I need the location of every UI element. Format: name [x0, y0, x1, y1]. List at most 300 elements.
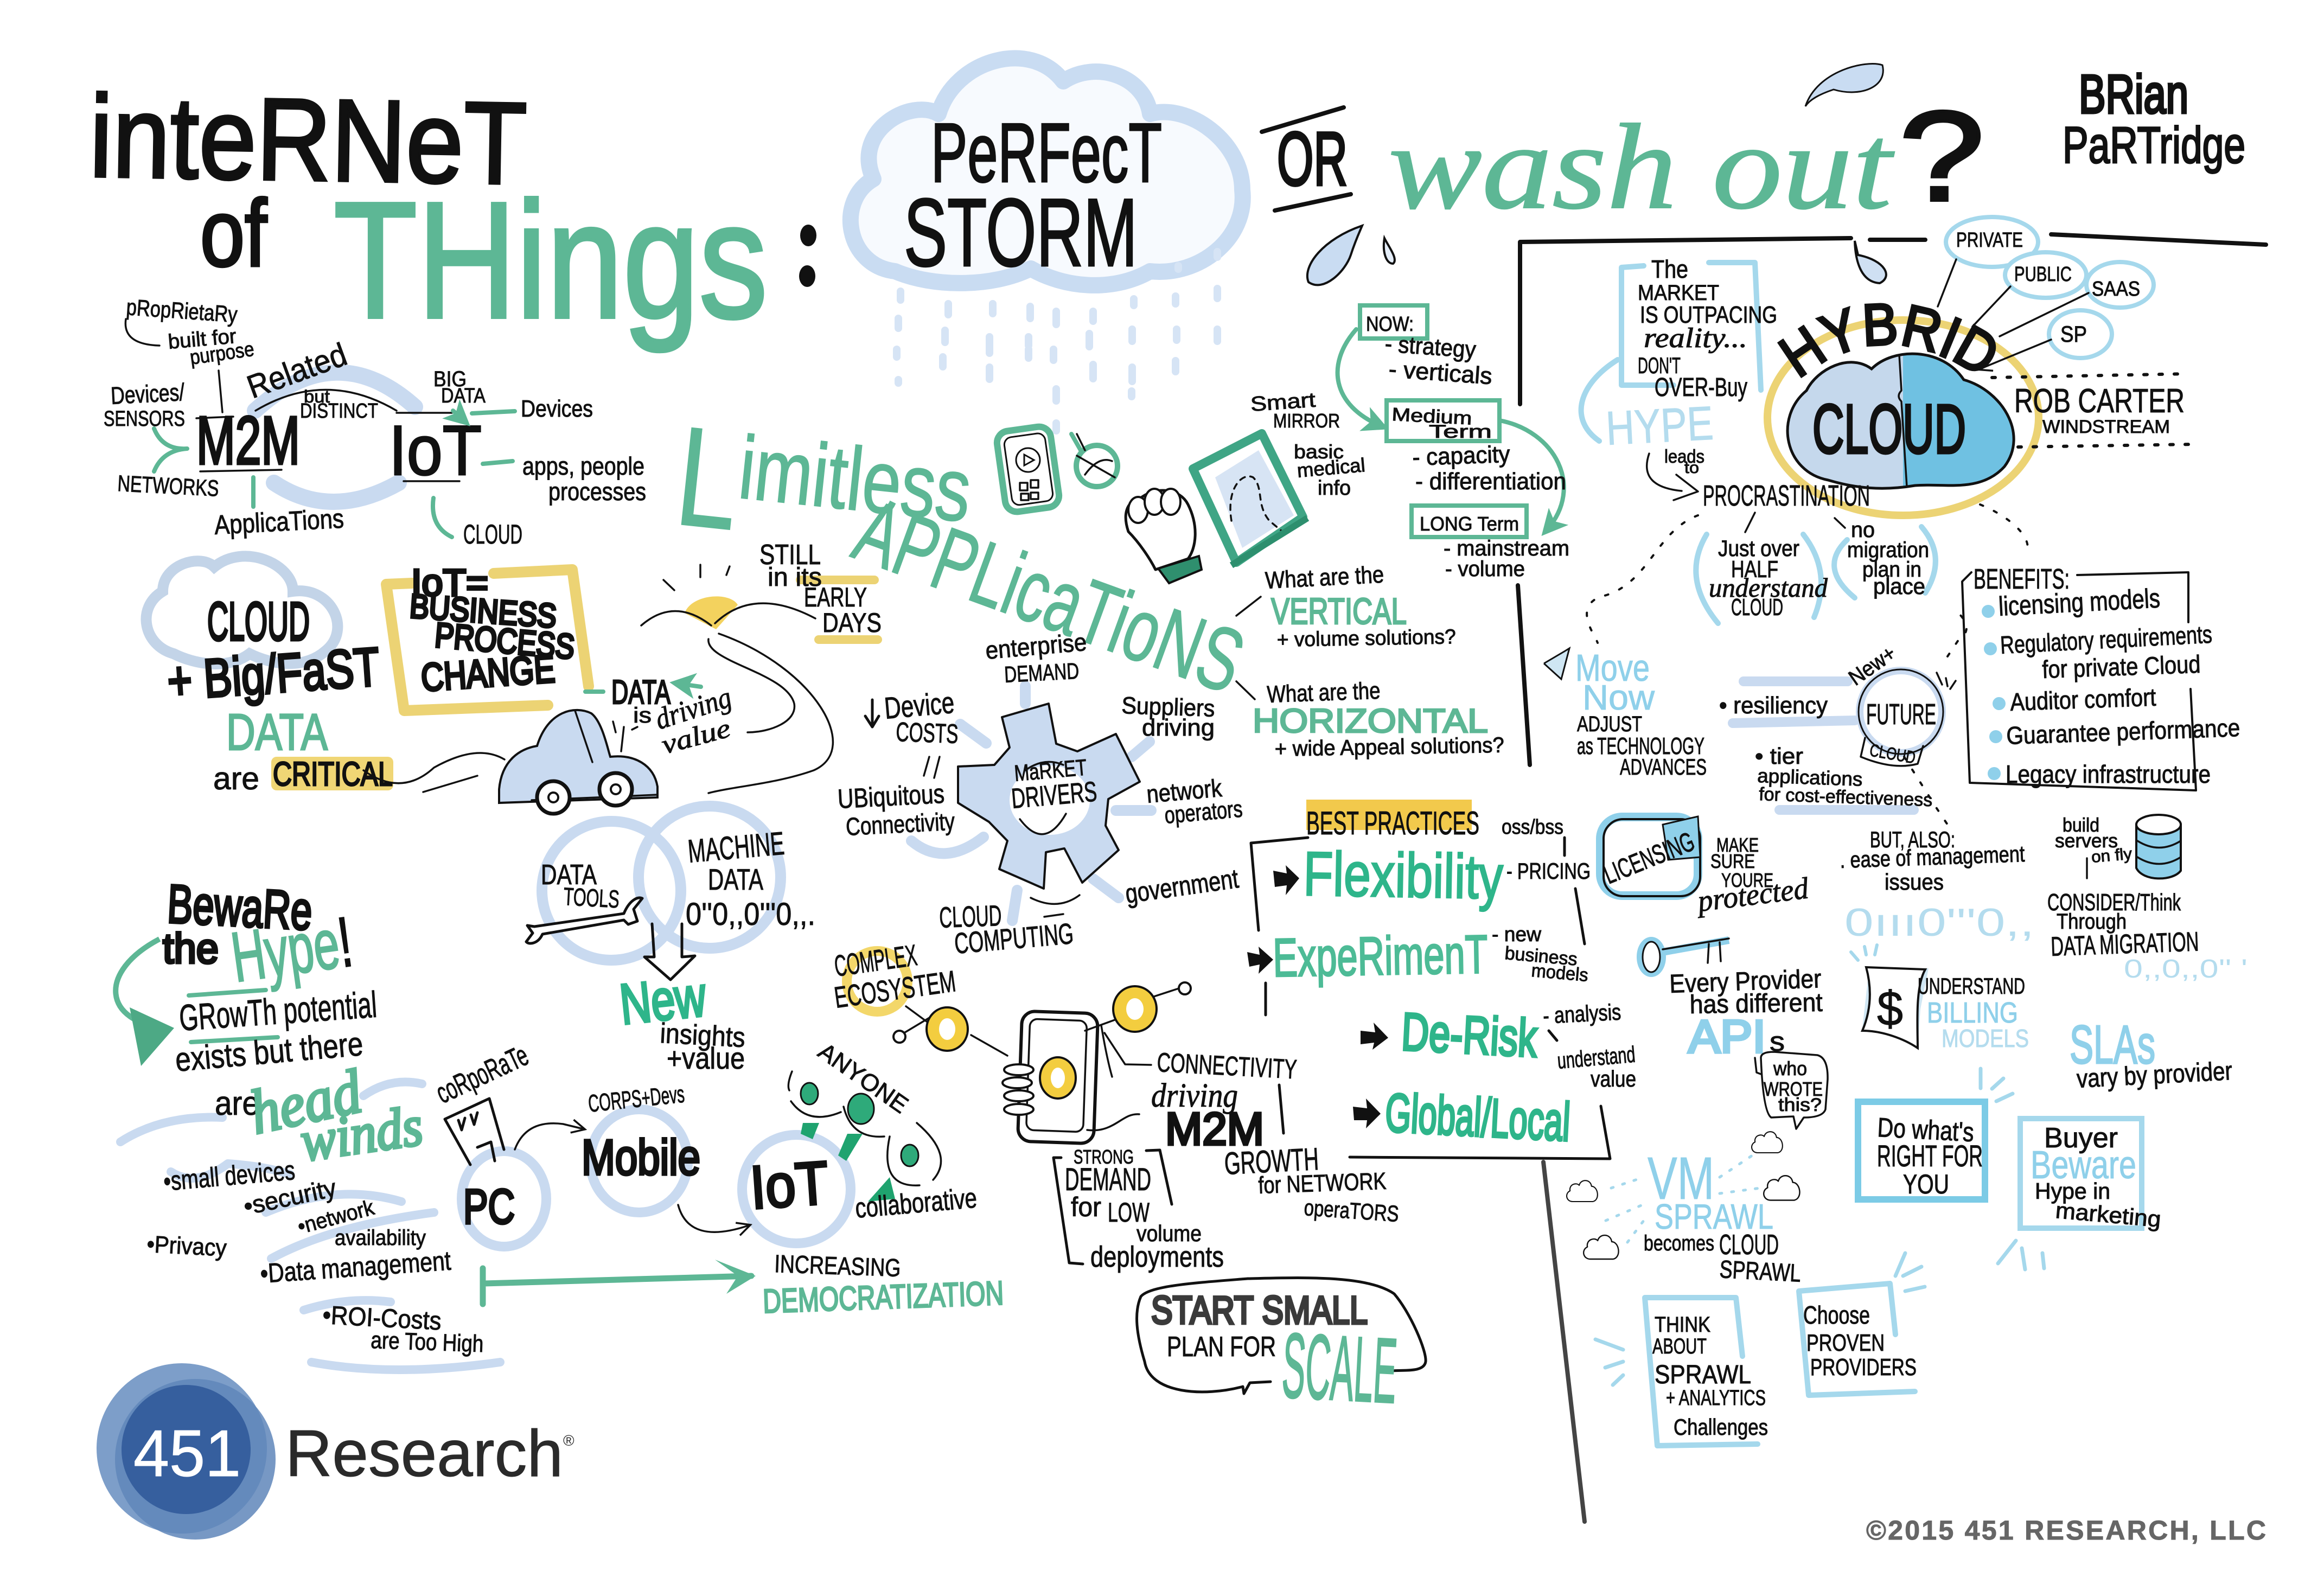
panel: complex ecosystem phone — [832, 938, 1400, 1273]
icon: check mark — [1544, 648, 1569, 679]
presenter: Brian Partridge: PaRTridge — [2063, 117, 2245, 174]
panel: beware the hype: GRowTh potential — [178, 984, 378, 1039]
panel: do what's right for you — [1858, 1069, 2013, 1199]
panel: M2M vs IoT: but — [304, 387, 330, 406]
panel: complex ecosystem phone: LOW — [1108, 1197, 1150, 1228]
panel: beware the hype: head — [244, 1057, 367, 1147]
icon: crystal ball future — [1859, 669, 1943, 768]
panel: billing models: BILLING — [1927, 997, 2018, 1029]
panel: APIs key: this? — [1778, 1095, 1822, 1115]
panel: roadmap now medium long term: - verticals — [1388, 356, 1493, 389]
panel: market outpacing reality: DON'T — [1638, 353, 1681, 378]
panel: APIs key: s — [1770, 1026, 1785, 1057]
panel: VM sprawl: becomes — [1644, 1231, 1714, 1255]
panel: best practices: - analysis — [1542, 999, 1621, 1029]
icons: wearables: medical — [1296, 454, 1366, 482]
icon: gear — [958, 704, 1140, 889]
panel: move now and future cloud: Now — [1582, 678, 1655, 717]
icons: wearables: MIRROR — [1273, 410, 1340, 432]
arrow: curved green — [116, 939, 167, 1028]
panel: data tools and machine data venn: MACHINE — [686, 825, 786, 870]
logo: 451 Research: ® — [563, 1432, 574, 1449]
icon: wrench — [526, 898, 642, 943]
panel: licensing: LICENSING — [1599, 826, 1699, 890]
panel: move now and future cloud: as TECHNOLOGY — [1577, 733, 1704, 759]
heading: Limitless Applications: imitless — [735, 417, 976, 541]
panel: M2M vs IoT: apps, people — [522, 452, 644, 480]
panel: hybrid cloud — [1764, 215, 2190, 519]
panel: benefits: Legacy infrastructure — [2006, 760, 2211, 788]
icons: wearables: Smart — [1250, 389, 1317, 416]
panel: beware the hype: are — [215, 1085, 259, 1122]
icon: lamp — [1071, 434, 1118, 487]
panel: but also data migration — [1840, 814, 2248, 984]
panel: data driving value with car and road: DAYS — [822, 608, 882, 638]
panel: roadmap now medium long term: NOW: — [1366, 313, 1414, 336]
speech bubble — [1755, 1052, 1828, 1129]
panel: hybrid cloud: PUBLIC — [2014, 263, 2072, 286]
panel: market outpacing reality: migration — [1847, 538, 1929, 562]
panel: billing models: MODELS — [1942, 1024, 2029, 1052]
panel: vertical or horizontal: HORIZONTAL — [1253, 703, 1488, 740]
panel: benefits: Regulatory requirements — [2000, 620, 2213, 659]
panel: roadmap now medium long term: - strategy — [1384, 330, 1477, 363]
panel: complex ecosystem phone: GROWTH — [1223, 1141, 1319, 1182]
panel: beware the hype: availability — [335, 1226, 426, 1250]
panel: market outpacing reality: OVER-Buy — [1655, 373, 1747, 402]
arrows — [154, 411, 515, 537]
panel: but also data migration: 0,,0,,0'' ' — [2124, 955, 2248, 984]
panel: M2M vs IoT: Related — [242, 336, 352, 405]
heading: Limitless Applications — [669, 397, 1256, 712]
panel: beware the hype: •ROI-Costs — [322, 1301, 442, 1336]
panel: market outpacing reality: reality... — [1644, 323, 1747, 354]
panel: IoT business process change: BUSINESS — [408, 588, 558, 635]
heading: Limitless Applications: APPLicaTioNS — [842, 480, 1256, 712]
callout: start small plan for scale: PLAN FOR — [1167, 1331, 1276, 1363]
panel: roadmap now medium long term: Medium — [1391, 404, 1472, 429]
panel: best practices: models — [1530, 960, 1589, 986]
panel: vertical or horizontal: What are the — [1267, 678, 1381, 708]
panel: benefits — [1962, 564, 2240, 790]
arrow — [644, 924, 695, 980]
panel: M2M vs IoT: Devices — [521, 395, 593, 422]
panel: IoT business process change: PROCESS — [433, 615, 576, 666]
panel: Cloud big fast data: DATA — [226, 704, 328, 761]
hybrid cloud icon — [1787, 354, 2014, 488]
icon: fist with band — [1126, 489, 1202, 583]
panel: complex ecosystem phone: M2M — [1165, 1103, 1264, 1154]
panel: hybrid cloud: CLOUD — [1812, 391, 1966, 468]
panel: data tools and machine data venn: DATA — [541, 859, 597, 891]
panel: PC to mobile to IoT: CORPS+Devs — [587, 1080, 686, 1118]
icon: smart mirror — [1193, 433, 1307, 565]
panel: market outpacing reality: IS OUTPACING — [1640, 302, 1777, 328]
panel: move now and future cloud: • tier — [1755, 743, 1803, 769]
panel: but also data migration: servers — [2055, 829, 2118, 852]
heading: internet: inteRNeT — [88, 71, 528, 209]
icon: sun and hills — [685, 596, 738, 629]
panel: best practices: oss/bss — [1502, 816, 1563, 839]
arrow: democratization timeline — [483, 1260, 756, 1304]
panel: best practices: value — [1591, 1066, 1636, 1091]
panel: best practices — [1247, 800, 1636, 1159]
panel: benefits: BENEFITS: — [1974, 564, 2070, 595]
panel: complex ecosystem phone: volume — [1137, 1221, 1202, 1246]
panel: roadmap now medium long term: LONG Term — [1420, 513, 1519, 535]
panel: data driving value with car and road — [363, 539, 882, 814]
icon: crystal ball future: FUTURE — [1866, 698, 1936, 731]
panel: do what's right for you: YOU — [1903, 1169, 1949, 1199]
icon: arrows — [1247, 865, 1388, 1128]
panel: think about sprawl: THINK — [1655, 1313, 1710, 1337]
panel: PC to mobile to IoT — [431, 1038, 1004, 1320]
panel: M2M vs IoT: built for — [167, 325, 238, 354]
panel: hybrid cloud: ROB CARTER — [2014, 382, 2185, 420]
panel: data driving value with car and road: value — [658, 712, 733, 760]
panel: buyer beware: Buyer — [2044, 1122, 2118, 1154]
heading: or: OR — [1277, 116, 1348, 201]
panel: move now and future cloud: • resiliency — [1719, 692, 1828, 719]
copyright: ©2015 451 RESEARCH, LLC — [1866, 1515, 2266, 1546]
panel: PC to mobile to IoT: coRpoRaTe — [431, 1038, 533, 1110]
panel: hybrid cloud: SAAS — [2092, 278, 2140, 301]
panel: data driving value with car and road: is — [633, 704, 652, 727]
panel: hybrid cloud: PRIVATE — [1956, 229, 2023, 252]
panel: best practices: Global/Local — [1384, 1082, 1572, 1153]
panel: VM sprawl: SPRAWL — [1655, 1197, 1773, 1236]
icon: car — [499, 710, 657, 814]
panel: VM sprawl: VM — [1648, 1145, 1714, 1212]
icon: key — [1639, 938, 1729, 974]
panel: market drivers gear: operators — [1164, 796, 1243, 829]
panel: complex ecosystem phone: STRONG — [1074, 1146, 1134, 1168]
rain — [897, 252, 1217, 431]
question mark: ? — [1899, 85, 1984, 227]
panel: move now and future cloud — [1544, 613, 1967, 825]
panel: PC to mobile to IoT: IoT — [748, 1148, 831, 1222]
icon: phone in hand — [1003, 1011, 1098, 1144]
panel: complex ecosystem phone: CONNECTIVITY — [1156, 1047, 1298, 1084]
panel: buyer beware: Beware — [2031, 1144, 2136, 1187]
panel: market drivers gear: CLOUD — [938, 899, 1002, 934]
panel: vertical or horizontal: VERTICAL — [1271, 591, 1407, 632]
panel: but also data migration: on fly — [2091, 845, 2133, 866]
panel: data driving value with car and road: STILL — [759, 539, 821, 571]
panel: Cloud big fast data: are — [213, 761, 259, 796]
icon: dollar bill — [1862, 967, 1929, 1048]
panel: but also data migration: build — [2063, 814, 2099, 836]
small clouds: private public saas sp — [1946, 217, 2154, 358]
panel: market outpacing reality: The — [1651, 255, 1688, 283]
panel: best practices: Flexibility — [1303, 839, 1504, 912]
storm cloud — [851, 58, 1243, 285]
icon: phone remote — [995, 425, 1061, 513]
panel: M2M vs IoT: processes — [548, 477, 646, 506]
panel: best practices: BEST PRACTICES — [1306, 805, 1479, 841]
panel: buyer beware: marketing — [2054, 1197, 2162, 1232]
panel: beware the hype: exists but there — [174, 1025, 365, 1079]
panel: do what's right for you: RIGHT FOR — [1877, 1139, 1983, 1173]
panel: but also data migration: Through — [2057, 910, 2127, 934]
panel: choose proven providers — [1799, 1253, 1925, 1395]
panel: buyer beware: Hype in — [2035, 1178, 2110, 1204]
panel: billing models: UNDERSTAND — [1918, 973, 2025, 999]
panel: hybrid cloud: HYBRID — [1777, 303, 1996, 379]
panel: best practices: understand — [1556, 1042, 1636, 1074]
panel: think about sprawl: ABOUT — [1652, 1334, 1707, 1358]
panel: market drivers gear: Suppliers — [1121, 692, 1215, 722]
panel: market outpacing reality — [1581, 255, 2028, 643]
logo: 451 Research — [97, 1363, 574, 1540]
panel: roadmap now medium long term — [1338, 305, 1569, 581]
icon: person in corner — [1663, 816, 1700, 860]
panel: best practices: ExpeRimenT — [1272, 924, 1488, 988]
logo: 451 Research: 451 — [133, 1416, 241, 1490]
panel: think about sprawl: SPRAWL — [1655, 1361, 1751, 1389]
panel: move now and future cloud: applications — [1757, 764, 1863, 790]
panel: market outpacing reality: CLOUD — [1731, 594, 1783, 621]
panel: think about sprawl — [1595, 1298, 1768, 1446]
panel: think about sprawl: + ANALYTICS — [1666, 1386, 1766, 1410]
logo: 451 Research: Research — [285, 1416, 563, 1490]
panel: think about sprawl: Challenges — [1674, 1414, 1768, 1440]
panel: IoT business process change: IoT= — [411, 561, 488, 604]
panel: data tools and machine data venn: TOOLS — [563, 882, 620, 913]
icon: dollar bill: $ — [1877, 982, 1903, 1036]
panel: choose proven providers: PROVEN — [1806, 1330, 1885, 1356]
pale spokes — [911, 686, 1151, 921]
panel: billing models: SLAs — [2070, 1014, 2155, 1075]
panel: choose proven providers: PROVIDERS — [1810, 1354, 1917, 1381]
panel: complex ecosystem phone: ECOSYSTEM — [832, 964, 957, 1014]
colon — [799, 225, 816, 287]
panel: benefits: Auditor comfort — [2010, 683, 2156, 716]
panel: market drivers gear: MaRKET — [1013, 754, 1088, 786]
panel: APIs key: who — [1773, 1057, 1807, 1080]
icon: collaborating people — [788, 1071, 941, 1202]
panel: roadmap now medium long term: Term — [1429, 422, 1492, 442]
panel: market outpacing reality: no — [1851, 518, 1875, 542]
panel: move now and future cloud: Move — [1575, 647, 1650, 689]
panel: M2M vs IoT: ApplicaTions — [214, 503, 344, 540]
panel: M2M vs IoT: DATA — [441, 385, 486, 407]
heading: Storm: STORM — [904, 178, 1138, 286]
panel: hybrid cloud: SP — [2060, 321, 2087, 347]
panel: data driving value with car and road: driving — [651, 680, 736, 736]
panel: best practices: - new — [1492, 923, 1542, 946]
label: M2M: M2M — [196, 403, 300, 478]
panel: market drivers gear: COMPUTING — [953, 917, 1075, 960]
highlight — [271, 757, 393, 790]
panel: best practices: - PRICING — [1506, 858, 1591, 884]
panel: licensing: protected — [1694, 871, 1811, 918]
panel: M2M vs IoT: Devices/ — [110, 378, 186, 410]
panel: benefits: for private Cloud — [2042, 650, 2201, 684]
panel: PC to mobile to IoT: ANYONE — [813, 1038, 913, 1119]
panel: beware the hype: the — [163, 924, 219, 972]
panel: complex ecosystem phone: for NETWORK — [1258, 1168, 1387, 1199]
label: IoT: IoT — [389, 411, 482, 490]
panel: licensing: MAKE — [1716, 834, 1759, 856]
panel: do what's right for you: Do what's — [1876, 1112, 1975, 1147]
text: SCALE — [1280, 1314, 1400, 1423]
yellow ring — [1767, 320, 2039, 515]
panel: data tools and machine data venn: insights — [659, 1018, 746, 1053]
icon: yellow nodes — [927, 986, 1157, 1099]
panel: licensing: SURE — [1710, 850, 1755, 872]
icon: small clouds — [1567, 1132, 1799, 1259]
panel: M2M vs IoT: SENSORS — [104, 407, 185, 431]
panel: licensing: YOURE — [1721, 869, 1773, 891]
panel: VM sprawl — [1567, 1132, 1802, 1287]
panel: benefits: Guarantee performance — [2006, 713, 2240, 750]
panel: market drivers gear: UBiquitous — [837, 778, 945, 814]
panel: PC to mobile to IoT: DEMOCRATIZATION — [762, 1275, 1004, 1320]
panel: market outpacing reality: MARKET — [1638, 281, 1719, 305]
panel: beware the hype — [116, 873, 500, 1370]
panel: move now and future cloud: ADJUST — [1577, 712, 1642, 736]
panel: market outpacing reality: place — [1873, 573, 1925, 599]
panel: M2M vs IoT: purpose — [188, 338, 256, 369]
panel: IoT business process change — [386, 561, 589, 711]
panel: data tools and machine data venn: New — [617, 965, 709, 1037]
panel: complex ecosystem phone: for — [1071, 1192, 1101, 1222]
panel: benefits: licensing models — [1998, 583, 2161, 622]
panel: APIs key: API — [1688, 1011, 1766, 1063]
panel: roadmap now medium long term: - mainstream — [1444, 537, 1569, 560]
panel: beware the hype: •network — [295, 1196, 377, 1239]
panel: billing models: vary by provider — [2076, 1057, 2233, 1094]
panel: APIs key: has different — [1689, 988, 1823, 1019]
panel: APIs key — [1639, 938, 1828, 1129]
panel: market drivers gear: enterprise — [984, 628, 1088, 665]
panel: VM sprawl: CLOUD — [1719, 1229, 1779, 1261]
panel: best practices: business — [1504, 943, 1578, 970]
panel: M2M vs IoT — [104, 294, 646, 550]
panel: beware the hype: BewaRe — [166, 873, 314, 942]
icon: office building — [445, 1099, 504, 1165]
panel: PC to mobile to IoT: PC — [463, 1180, 515, 1234]
panel: APIs key: WROTE — [1764, 1078, 1823, 1100]
panel: choose proven providers: Choose — [1803, 1301, 1870, 1329]
panel: billing models — [1851, 945, 2233, 1094]
panel: data tools and machine data venn: DATA — [708, 863, 763, 896]
panel: M2M vs IoT: CLOUD — [463, 519, 522, 550]
panel: but also data migration: CONSIDER/Think — [2047, 889, 2181, 916]
panel: market outpacing reality: Just over — [1718, 535, 1799, 561]
panel: complex ecosystem phone: operaTORS — [1303, 1195, 1400, 1227]
icons: wearables: info — [1318, 477, 1351, 500]
icon: crystal ball future: CLOUD — [1868, 740, 1917, 768]
panel: data tools and machine data venn: +value — [667, 1041, 745, 1075]
icon: drops — [1307, 64, 1886, 285]
panel: hybrid cloud: WINDSTREAM — [2042, 417, 2170, 437]
panel: vertical or horizontal — [1236, 561, 1504, 761]
heading: Perfect: PeRFecT — [931, 106, 1162, 200]
panel: complex ecosystem phone: driving — [1151, 1077, 1238, 1114]
panel: VM sprawl: SPRAWL — [1719, 1255, 1802, 1287]
panel: but also data migration: DATA MIGRATION — [2050, 926, 2199, 962]
panel: complex ecosystem phone: DEMAND — [1065, 1162, 1151, 1197]
bullets — [1982, 605, 2006, 780]
panel: IoT business process change: CHANGE — [420, 647, 557, 700]
panel: but also data migration: . ease of management — [1840, 841, 2025, 873]
panel: market drivers gear — [837, 628, 1243, 960]
panel: data driving value with car and road: DATA — [611, 674, 671, 711]
panel: beware the hype: •security — [241, 1173, 339, 1221]
panel: Cloud big fast data — [146, 556, 393, 796]
panel: market outpacing reality: plan in — [1862, 558, 1921, 582]
panel: market outpacing reality: leads — [1664, 446, 1704, 467]
panel: market outpacing reality: understand — [1709, 572, 1828, 603]
frame lines — [1518, 234, 2266, 765]
panel: Cloud big fast data: CRITICAL — [273, 756, 393, 793]
panel: complex ecosystem phone: deployments — [1090, 1241, 1224, 1273]
panel: market outpacing reality: PROCRASTINATION — [1703, 480, 1870, 512]
presenter: Brian Partridge — [2063, 64, 2245, 174]
cloud — [146, 556, 337, 664]
panel: M2M vs IoT: NETWORKS — [117, 470, 220, 501]
icons: wearables — [995, 389, 1366, 583]
panel: roadmap now medium long term: - differentiation — [1415, 468, 1566, 495]
callout: start small plan for scale — [1137, 1278, 1426, 1423]
panel: beware the hype: are Too High — [371, 1327, 484, 1357]
panel: roadmap now medium long term: - volume — [1445, 557, 1525, 581]
panel: market drivers gear: Device — [883, 685, 956, 725]
icon: database — [2136, 815, 2181, 878]
heading: Things: THings — [334, 168, 768, 354]
panel: roadmap now medium long term: - capacity — [1412, 441, 1510, 471]
heading: Limitless Applications: L — [669, 397, 746, 560]
panel: complex ecosystem phone: COMPLEX — [832, 938, 919, 983]
panel: buyer beware — [1998, 1119, 2162, 1269]
panel: Cloud big fast data: + Big/FaST — [165, 636, 382, 712]
panel: M2M vs IoT: pRopRietaRy — [125, 294, 238, 327]
panel: beware the hype: winds — [297, 1094, 426, 1173]
panel: market drivers gear: COSTS — [896, 717, 959, 749]
panel: beware the hype: Hype! — [227, 902, 357, 997]
panel: data tools and machine data venn — [526, 806, 815, 1075]
panel: market outpacing reality: HYPE — [1605, 396, 1715, 455]
panel: M2M vs IoT: DISTINCT — [300, 400, 378, 423]
heading: of: of — [200, 181, 267, 286]
label: hybrid — [1798, 344, 1985, 380]
panel: PC to mobile to IoT: Mobile — [582, 1130, 700, 1185]
panel: beware the hype: •Data management — [259, 1246, 452, 1289]
panel: M2M vs IoT: BIG — [433, 367, 467, 391]
panel: market outpacing reality: HALF — [1731, 556, 1778, 583]
highlight: best practices — [1306, 800, 1472, 830]
panel: but also data migration: issues — [1885, 869, 1944, 895]
panel: vertical or horizontal: What are the — [1265, 561, 1384, 594]
panel: PC to mobile to IoT: collaborative — [854, 1183, 978, 1224]
panel: vertical or horizontal: + wide Appeal solutions? — [1274, 733, 1504, 761]
presenter: Brian Partridge: BRian — [2079, 64, 2188, 125]
title — [88, 58, 2245, 431]
panel: licensing — [1599, 816, 1811, 918]
panel: data tools and machine data venn: 0''0,,0'''0,,. — [686, 897, 815, 932]
panel: market drivers gear: network — [1145, 774, 1223, 808]
panel: market drivers gear: DRIVERS — [1010, 776, 1098, 815]
heading: or — [1262, 107, 1351, 210]
panel: move now and future cloud: for cost-effectiveness — [1759, 784, 1933, 810]
pale arcs — [255, 373, 415, 502]
icons: wearables: basic — [1294, 440, 1344, 463]
panel: best practices: De-Risk — [1400, 1001, 1539, 1068]
panel: but also data migration: BUT, ALSO: — [1870, 827, 1955, 852]
panel: market outpacing reality: to — [1684, 459, 1699, 477]
